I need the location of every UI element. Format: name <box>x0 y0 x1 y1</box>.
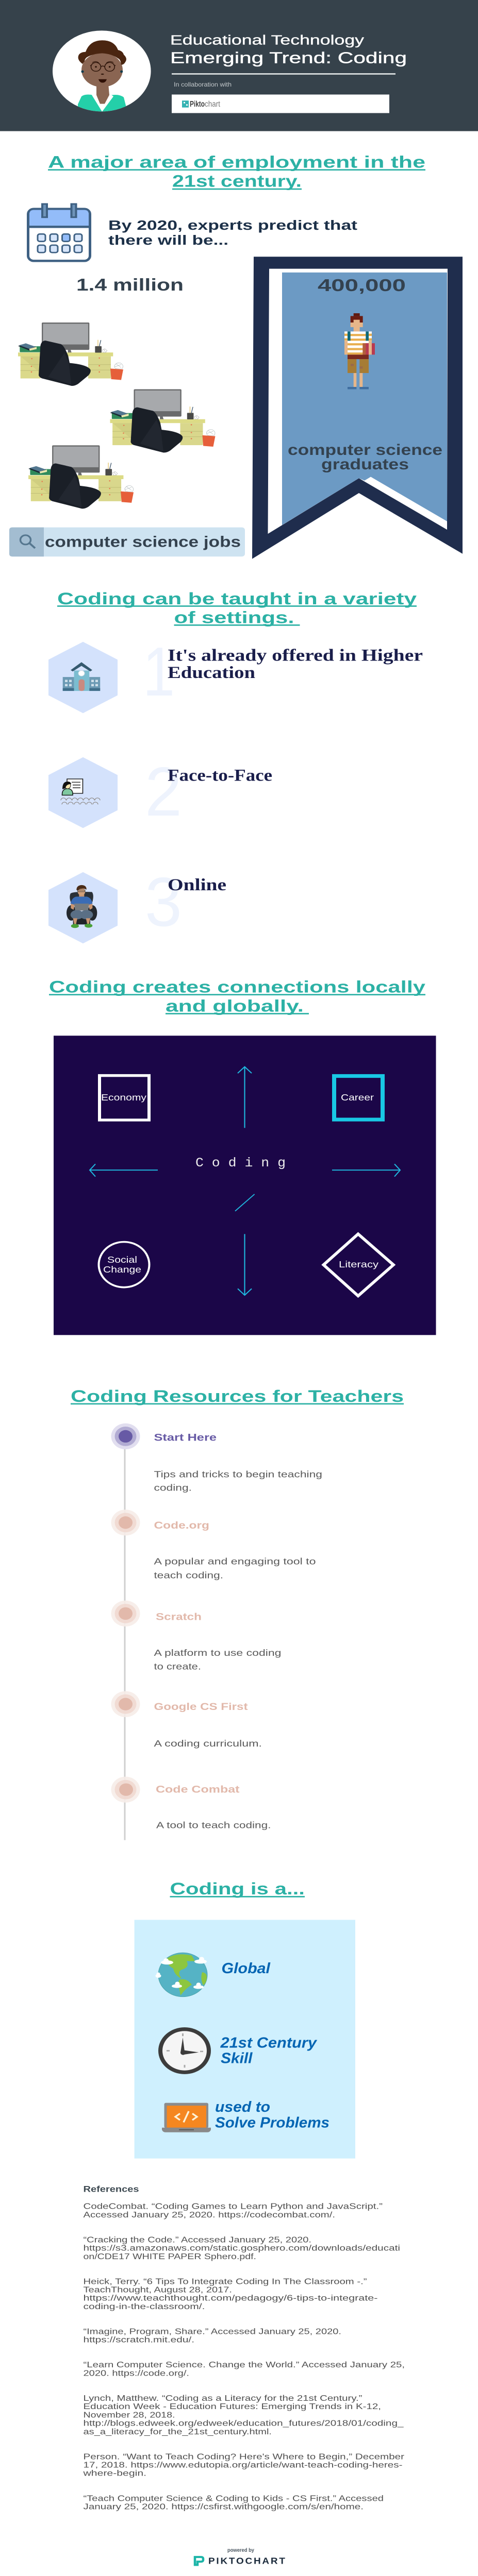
heading: employment: A major area of employment in the <box>48 153 425 172</box>
header title: Educational Technology <box>170 32 364 47</box>
resource: start here: coding. <box>154 1483 192 1493</box>
reference list: as_a_literacy_for_the_21st_century.html. <box>84 2428 272 2436</box>
reference list: Accessed January 25, 2020. https://codecombat.com/. <box>84 2211 335 2219</box>
arrow: up <box>238 1067 252 1128</box>
search bar: computer science jobs <box>45 533 241 550</box>
box: career <box>334 1076 383 1120</box>
heading: connections: and globally. <box>166 997 304 1015</box>
logo wordmark: PIKTOCHART <box>208 2556 285 2566</box>
icon: desk 3 <box>28 445 134 509</box>
reference list: https://scratch.mit.edu/. <box>84 2335 194 2344</box>
reference list: “Imagine, Program, Share.” Accessed January 25, 2020. <box>84 2327 341 2336</box>
header banner <box>0 0 478 131</box>
setting text: Education <box>168 664 255 682</box>
setting 1: higher education <box>48 633 423 713</box>
stat: 400,000: 400,000 <box>318 276 406 295</box>
label: 21st century skill <box>220 2035 318 2066</box>
setting text: Online <box>168 875 226 894</box>
panel: coding is a <box>135 1920 355 2159</box>
search bar <box>9 528 245 556</box>
center label: C o d i n g <box>195 1156 286 1170</box>
icon: desk 2 <box>110 389 215 453</box>
heading: coding is a: Coding is a... <box>170 1880 305 1898</box>
resource: start here: Tips and tricks to begin teaching <box>154 1469 322 1480</box>
reference list: coding-in-the-classroom/. <box>84 2302 205 2311</box>
icon: laptop with code <box>162 2103 211 2132</box>
resource: code.org: teach coding. <box>154 1570 223 1581</box>
box: career: Career <box>341 1093 374 1103</box>
collaborator logo box: chart <box>205 100 220 109</box>
setting text <box>168 646 423 682</box>
reference list: where-begin. <box>83 2469 146 2478</box>
collaboration label: In collaboration with <box>174 81 232 88</box>
avatar portrait <box>53 30 151 113</box>
reference list: 17, 2018. https://www.edutopia.org/article/want-teach-coding-heres- <box>84 2461 403 2469</box>
circle: social change: Change <box>103 1265 141 1275</box>
resource: scratch: to create. <box>154 1662 201 1672</box>
reference list: https://s3.amazonaws.com/static.gosphero.com/downloads/educati <box>84 2244 400 2252</box>
reference list: “Learn Computer Science. Change the World.” Accessed January 25, <box>84 2361 405 2369</box>
number 2: 2 <box>145 753 182 831</box>
reference list: 2020. https://code.org/. <box>84 2369 189 2378</box>
collaborator logo box <box>172 94 389 113</box>
heading: resources: Coding Resources for Teachers <box>71 1387 404 1405</box>
header title: Emerging Trend: Coding <box>170 49 407 66</box>
icon: school <box>63 662 100 691</box>
prediction statement: there will be... <box>108 232 228 248</box>
heading: settings: Coding can be taught in a variety <box>57 590 417 608</box>
prediction statement <box>108 217 357 248</box>
resource: code combat <box>111 1776 271 1831</box>
icon: teacher and class <box>61 779 100 804</box>
icon: globe <box>156 1953 207 1997</box>
heading: employment <box>48 153 425 191</box>
label: solve problems: Solve Problems <box>215 2114 329 2131</box>
setting 2: face-to-face <box>48 753 272 831</box>
panel: coding connections diagram <box>54 1036 436 1335</box>
resource: start here: Start Here <box>154 1432 217 1443</box>
box: economy <box>100 1076 149 1120</box>
resource: google cs first: Google CS First <box>154 1701 248 1713</box>
box: economy: Economy <box>101 1093 147 1103</box>
timeline: resources <box>111 1423 322 1840</box>
stat: 1.4 million jobs: 1.4 million <box>76 276 184 295</box>
label: 21st century skill: 21st Century <box>220 2035 318 2051</box>
graduates label: graduates <box>321 456 409 473</box>
arrow: down <box>238 1234 252 1295</box>
heading: connections: Coding creates connections locally <box>49 978 425 996</box>
collaborator logo box: Pikto <box>190 100 205 109</box>
heading: connections <box>49 978 425 1015</box>
resource: google cs first <box>111 1691 262 1749</box>
diamond: literacy: Literacy <box>339 1260 379 1270</box>
references <box>83 2184 405 2511</box>
heading: settings <box>57 590 417 627</box>
setting 3: online <box>48 863 226 943</box>
reference list: TeachThought, August 28, 2017. <box>84 2285 232 2294</box>
resource: code.org: Code.org <box>154 1520 209 1531</box>
ribbon: graduates <box>252 257 463 559</box>
number 3: 3 <box>145 863 182 941</box>
heading: employment: 21st century. <box>172 172 302 191</box>
resource: google cs first: A coding curriculum. <box>154 1739 262 1749</box>
diamond: literacy <box>324 1234 393 1296</box>
reference list: CodeCombat. “Coding Games to Learn Python and JavaScript.” <box>84 2202 383 2211</box>
header title <box>170 32 407 66</box>
reference list: Lynch, Matthew. “Coding as a Literacy for the 21st Century.” <box>84 2394 362 2403</box>
graduates label <box>288 442 442 473</box>
setting text: Face-to-Face <box>168 766 272 785</box>
circle: social change <box>99 1242 150 1287</box>
reference list: on/CDE17 WHITE PAPER Sphero.pdf. <box>84 2252 256 2261</box>
reference list: Person. “Want to Teach Coding? Here's Where to Begin,” December <box>84 2452 405 2461</box>
resource: code combat: Code Combat <box>156 1784 240 1795</box>
label: 21st century skill: Skill <box>221 2050 253 2066</box>
icon: clock <box>158 2027 211 2074</box>
prediction statement: By 2020, experts predict that <box>108 217 357 233</box>
resource: code combat: A tool to teach coding. <box>156 1820 271 1831</box>
reference list: Heick, Terry. “6 Tips To Integrate Coding In The Classroom -.” <box>84 2277 367 2286</box>
resource: code.org <box>111 1510 316 1581</box>
graduates label: computer science <box>288 442 442 459</box>
references heading: References <box>84 2184 139 2194</box>
arrow: right <box>332 1164 400 1177</box>
arrow: left <box>90 1164 158 1177</box>
circle: social change: Social <box>107 1255 137 1265</box>
number 1: 1 <box>143 633 175 710</box>
reference list: “Teach Computer Science & Coding to Kids - CS First.” Accessed <box>84 2494 384 2503</box>
icon: desk 1 <box>18 323 123 386</box>
resource: scratch: A platform to use coding <box>154 1648 282 1658</box>
reference list: http://blogs.edweek.org/edweek/education_futures/2018/01/coding_ <box>84 2419 404 2428</box>
icon: calendar <box>28 203 90 261</box>
label: solve problems: used to <box>215 2098 270 2115</box>
reference list: Education Week - Education Futures: Emerging Trends in K-12, <box>84 2402 381 2411</box>
resource: scratch: Scratch <box>156 1611 202 1622</box>
resource: scratch <box>111 1601 282 1672</box>
resource: code.org: A popular and engaging tool to <box>154 1556 316 1567</box>
heading: settings: of settings. <box>174 608 294 627</box>
reference list: November 28, 2018. <box>84 2411 175 2419</box>
reference list: “Cracking the Code.” Accessed January 25, 2020. <box>84 2235 311 2244</box>
label: solve problems <box>215 2098 329 2131</box>
reference list: January 25, 2020. https://csfirst.withgoogle.com/s/en/home. <box>84 2502 364 2511</box>
icon: person with laptop <box>67 885 97 928</box>
footer: powered by piktochart: powered by <box>227 2548 255 2553</box>
logo mark <box>195 2557 203 2565</box>
reference list <box>83 2202 405 2511</box>
reference list: https://www.teachthought.com/pedagogy/6-tips-to-integrate- <box>84 2294 378 2303</box>
footer: powered by piktochart <box>195 2548 285 2566</box>
slash line <box>235 1194 255 1211</box>
icon: student <box>344 313 375 389</box>
setting text: It's already offered in Higher <box>168 646 423 665</box>
resource: start here <box>111 1423 322 1493</box>
label: global: Global <box>222 1960 271 1976</box>
